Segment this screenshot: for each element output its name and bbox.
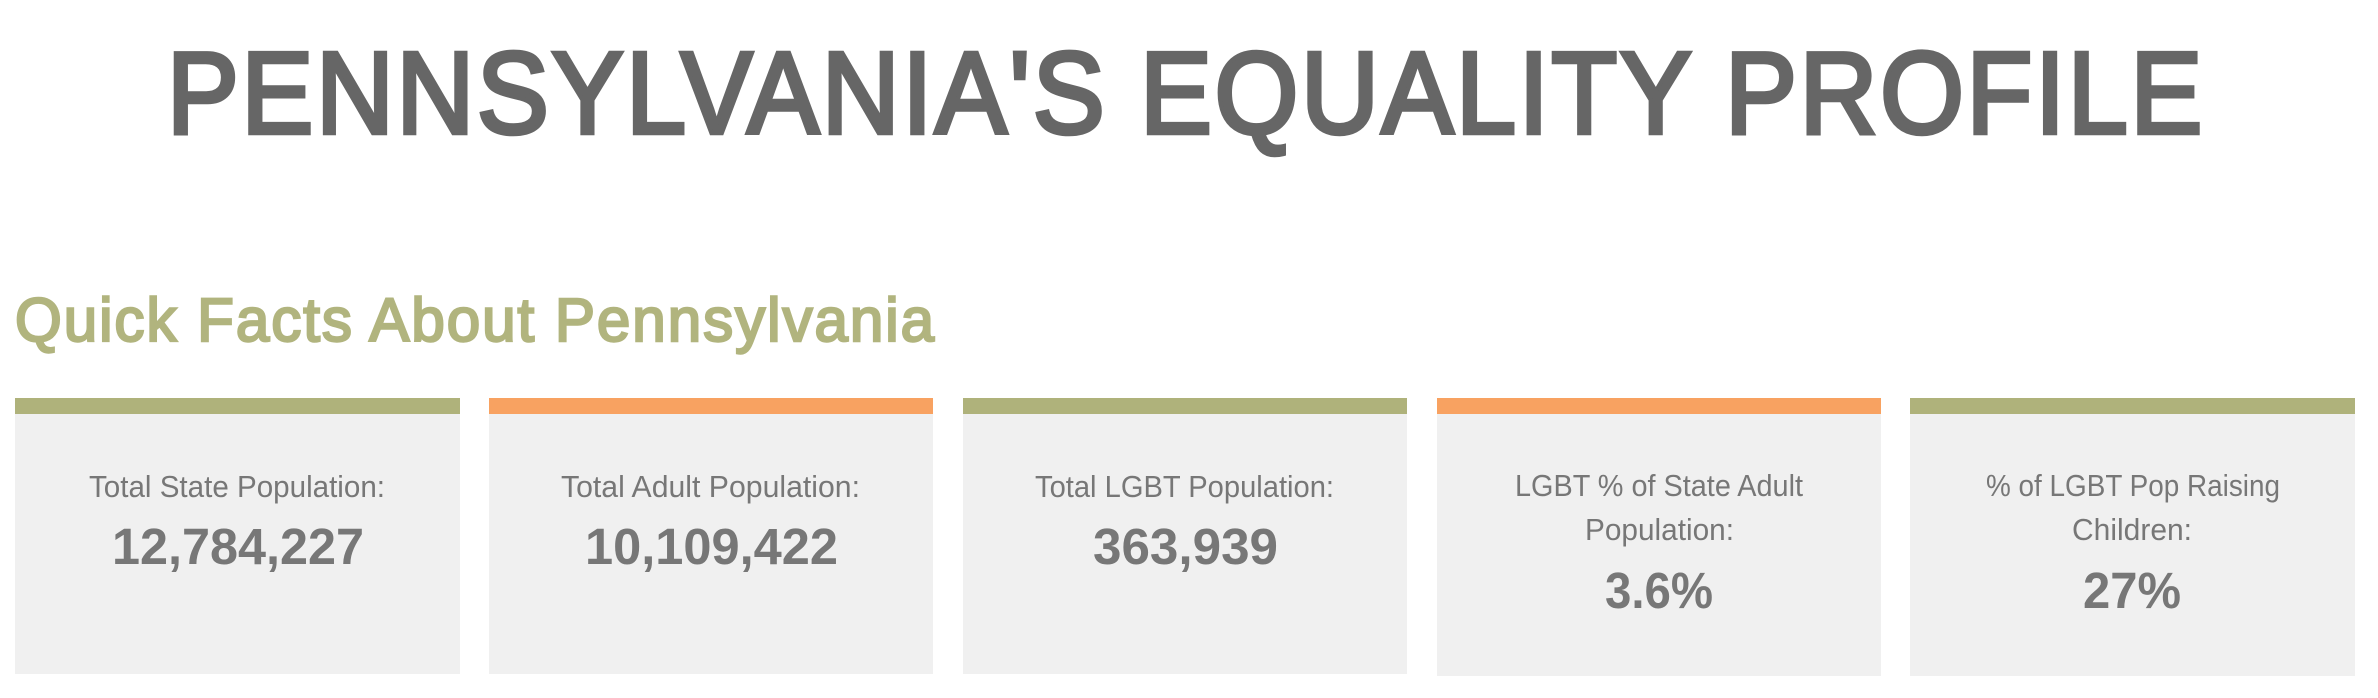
value: percent of lgbt pop raising children: 27% [2083,562,2181,619]
panel: total adult population [489,398,933,674]
value: total adult population: 10,109,422 [585,518,838,575]
label: total adult population: Total Adult Population: [561,469,860,504]
title: PENNSYLVANIA'S EQUALITY PROFILE [167,28,2205,158]
label: percent of lgbt pop raising children: % of LGBT Pop Raising [1986,468,2280,503]
panel: lgbt percent of state adult population [1437,398,1881,676]
label: lgbt percent of state adult population [1515,468,1803,547]
label: lgbt percent of state adult population: Population: [1585,512,1734,547]
panel: percent of lgbt pop raising children [1910,398,2355,676]
value: total state population: 12,784,227 [112,518,364,575]
label: lgbt percent of state adult population: LGBT % of State Adult [1515,468,1803,503]
heading: quick facts: Quick Facts About Pennsylvania [15,286,936,354]
value: total lgbt population: 363,939 [1093,518,1278,575]
panel: total lgbt population [963,398,1407,674]
label: percent of lgbt pop raising children [1986,468,2280,547]
value: lgbt percent of state adult population: 3.6% [1605,562,1713,619]
label: total lgbt population: Total LGBT Population: [1035,469,1334,504]
label: percent of lgbt pop raising children: Children: [2072,512,2192,547]
panel: total state population [15,398,460,674]
label: total state population: Total State Population: [89,469,385,504]
